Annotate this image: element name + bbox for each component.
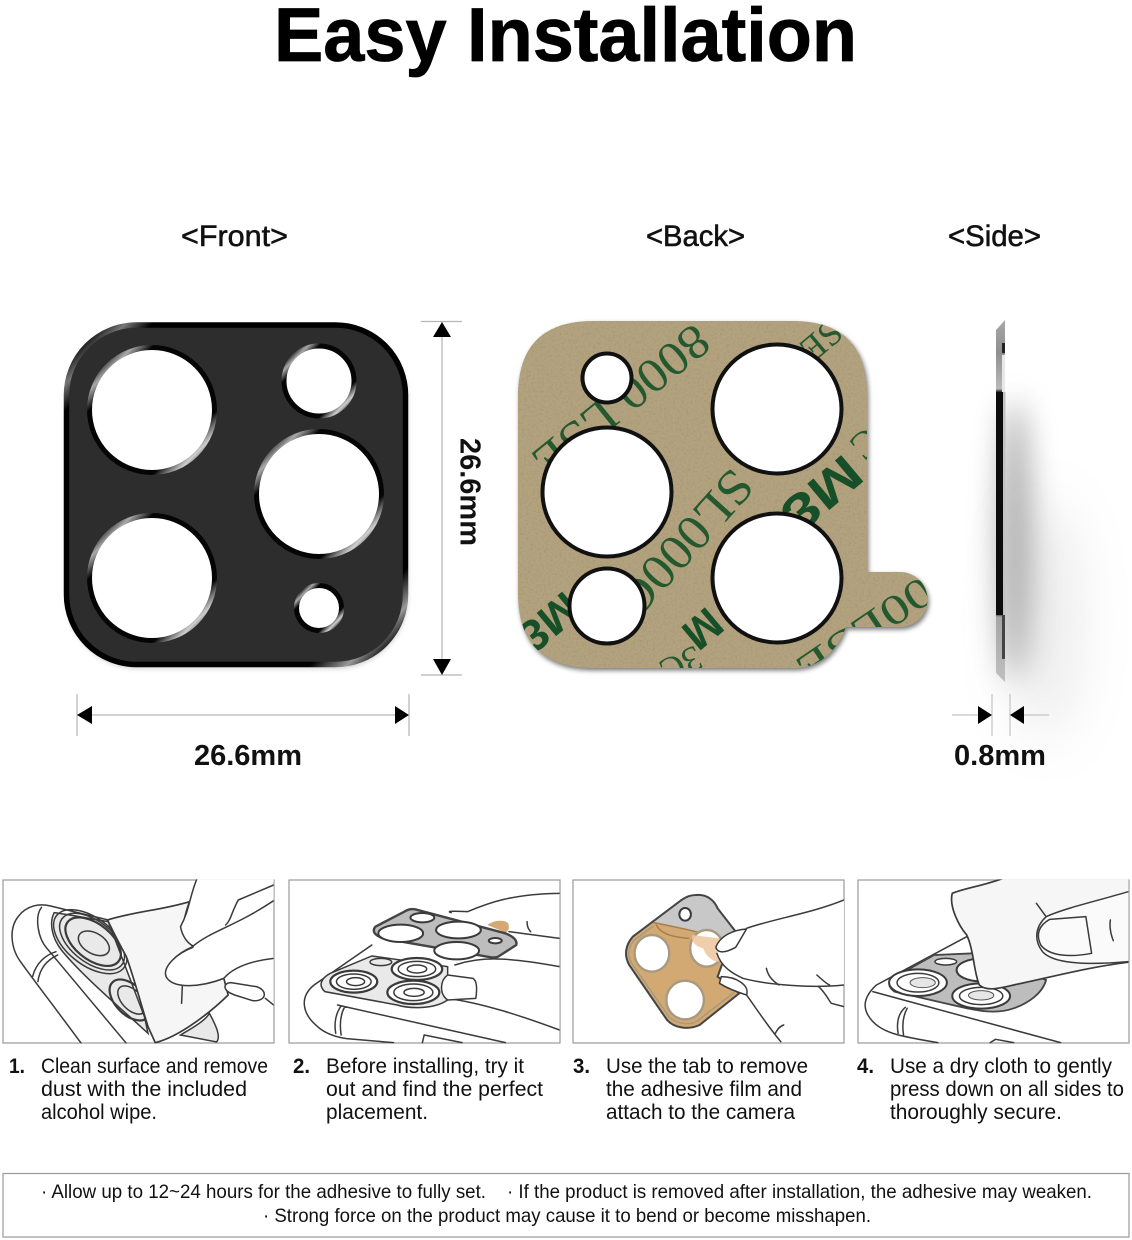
step 2 caption: Before installing, try it <box>326 1054 524 1078</box>
adhesive hole: small bottom left <box>570 568 644 644</box>
width dimension arrow <box>77 694 409 736</box>
step 1 caption: dust with the included <box>41 1077 247 1101</box>
printed liner text <box>522 324 928 668</box>
step 1 caption: Clean surface and remove <box>41 1054 268 1078</box>
step 3 caption: the adhesive film and <box>606 1077 802 1101</box>
step 4 caption: 4. <box>857 1055 874 1078</box>
step 2 caption <box>293 1054 543 1124</box>
step 4 illustration <box>858 877 1132 1043</box>
lens hole: small top right <box>284 346 354 416</box>
heading: front: <Front> <box>181 220 288 253</box>
step 4 caption: thoroughly secure. <box>890 1100 1062 1124</box>
heading: back: <Back> <box>646 220 745 253</box>
thickness label: 0.8mm <box>954 740 1046 772</box>
step 3 caption <box>573 1054 808 1124</box>
note: strong force: · Strong force on the product may cause it to bend or become misshapen. <box>263 1205 871 1227</box>
lens hole: middle right <box>256 432 382 556</box>
side view with soft shadow <box>996 320 1075 740</box>
printed liner text: 00LSE <box>788 567 942 692</box>
printed liner text: C <box>842 418 891 470</box>
lens hole: bottom left <box>90 516 214 640</box>
note: removal: · If the product is removed after installation, the adhesive may weaken. <box>507 1181 1092 1203</box>
step 4 caption: press down on all sides to <box>890 1077 1124 1101</box>
step 1 illustration <box>3 877 278 1043</box>
step 3 caption: 3. <box>573 1055 590 1078</box>
note: curing time: · Allow up to 12~24 hours for the adhesive to fully set. <box>41 1181 486 1203</box>
printed liner text: M <box>673 598 732 659</box>
adhesive hole: top right <box>712 344 842 474</box>
step 3 caption: Use the tab to remove <box>606 1054 808 1078</box>
heading: side: <Side> <box>948 220 1041 253</box>
height dimension arrow <box>421 322 462 675</box>
printed liner text: 3M <box>770 444 873 543</box>
step 2 illustration <box>289 880 567 1043</box>
adhesive hole: small top left <box>582 354 632 402</box>
step 1 caption: 1. <box>9 1055 25 1078</box>
back view with kraft adhesive liner <box>516 320 932 674</box>
width label: 26.6mm <box>194 740 302 772</box>
height label: 26.6mm <box>454 438 486 546</box>
adhesive hole: bottom right <box>712 514 842 642</box>
printed liner text: SL000G <box>603 459 765 630</box>
printed liner text: 8000 LSE <box>522 313 720 488</box>
adhesive hole: middle left <box>542 428 672 556</box>
front view of camera protector <box>66 325 408 669</box>
printed liner text: 3C <box>654 638 709 692</box>
step 2 caption: out and find the perfect <box>326 1077 543 1101</box>
step 4 caption: Use a dry cloth to gently <box>890 1054 1112 1078</box>
step 3 illustration <box>573 880 844 1043</box>
thickness dimension arrows <box>952 694 1049 736</box>
step 4 caption <box>857 1054 1124 1124</box>
notes panel <box>3 1174 1129 1237</box>
lens hole: small bottom right <box>296 586 342 630</box>
step 3 caption: attach to the camera <box>606 1100 795 1124</box>
step 1 caption <box>9 1054 268 1124</box>
printed liner text: 3M <box>508 582 590 662</box>
printed liner text: SE <box>793 312 851 370</box>
step 2 caption: 2. <box>293 1055 310 1078</box>
lens hole: top left <box>90 348 214 472</box>
step 2 caption: placement. <box>326 1100 428 1124</box>
step 1 caption: alcohol wipe. <box>41 1100 157 1124</box>
